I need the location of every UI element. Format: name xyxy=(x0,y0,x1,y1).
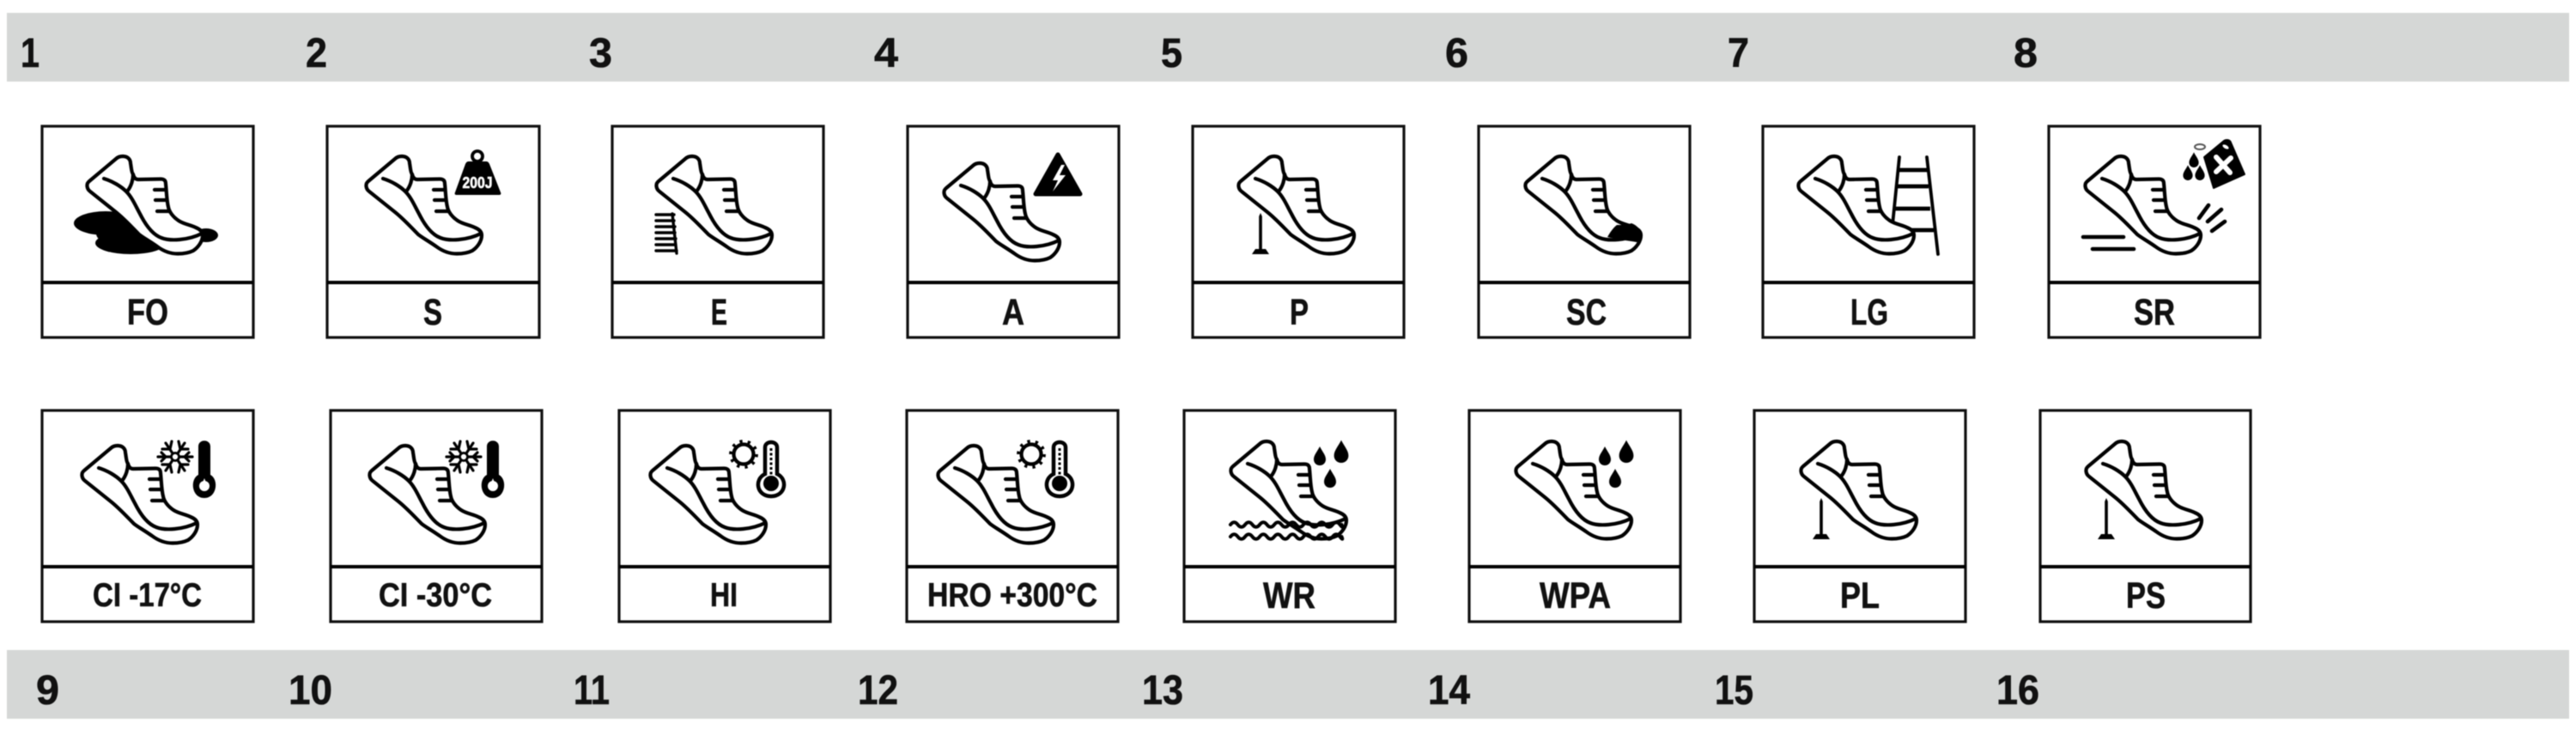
number 16: 16 xyxy=(1996,668,2039,714)
panel: CI -30°C xyxy=(331,410,542,622)
label LG: LG xyxy=(1850,292,1888,333)
number 11: 11 xyxy=(574,668,610,714)
label PL: PL xyxy=(1840,575,1880,617)
label SR: SR xyxy=(2134,292,2175,333)
number 8: 8 xyxy=(2014,31,2038,76)
label WR: WR xyxy=(1263,575,1315,617)
label HRO +300°C: HRO +300°C xyxy=(927,577,1097,614)
label S: S xyxy=(423,292,442,333)
icon: shoe with nail xyxy=(2086,441,2202,539)
panel: SR xyxy=(2049,126,2260,337)
number 2: 2 xyxy=(306,31,327,76)
panel: P xyxy=(1193,126,1404,337)
icon: shoe with snowflake and cold thermometer xyxy=(82,440,216,543)
icon: shoe with snowflake and cold thermometer xyxy=(369,440,504,543)
number 6: 6 xyxy=(1445,31,1468,76)
panel: HRO +300°C xyxy=(907,410,1118,622)
label CI -17°C: CI -17°C xyxy=(93,577,202,614)
label P: P xyxy=(1290,292,1309,333)
number 12: 12 xyxy=(858,668,898,714)
icon: shoe with sun and hot thermometer xyxy=(938,441,1072,543)
icon: shoe with nail xyxy=(1801,441,1917,539)
label FO: FO xyxy=(127,292,168,333)
panel: E xyxy=(612,126,823,337)
panel: WPA xyxy=(1469,410,1680,622)
label HI: HI xyxy=(710,577,738,614)
label PS: PS xyxy=(2126,575,2166,617)
icon: shoe with 200J weight: 200J xyxy=(462,174,493,191)
icon: shoe with electric warning xyxy=(944,155,1080,261)
icon: shoe with ladder xyxy=(1798,156,1938,254)
number 4: 4 xyxy=(874,31,898,76)
top header band xyxy=(7,13,2569,82)
label A: A xyxy=(1002,292,1024,333)
panel: LG xyxy=(1763,126,1974,337)
icon: shoe with 200J weight xyxy=(366,151,501,254)
panel: SC xyxy=(1479,126,1690,337)
panel: S xyxy=(327,126,539,337)
number 3: 3 xyxy=(589,31,612,76)
icon: shoe with spring xyxy=(656,156,772,254)
panel: PS xyxy=(2040,410,2251,622)
icon: shoe with scuff cap xyxy=(1525,156,1641,254)
bottom number band xyxy=(7,650,2569,719)
label E: E xyxy=(711,292,727,333)
icon: shoe with water drops xyxy=(1516,440,1633,539)
panel: A xyxy=(908,126,1119,337)
panel: FO xyxy=(42,126,253,337)
number 10: 10 xyxy=(289,668,332,714)
number 15: 15 xyxy=(1715,668,1753,714)
number 1: 1 xyxy=(21,31,39,76)
label SC: SC xyxy=(1566,292,1607,333)
icon: shoe with slip lines and chemical can xyxy=(2083,140,2245,254)
icon: shoe with nail xyxy=(1238,156,1354,254)
number 9: 9 xyxy=(36,668,59,714)
number 13: 13 xyxy=(1142,668,1183,714)
panel: CI -17°C xyxy=(42,410,253,622)
icon: shoe with sun and hot thermometer xyxy=(650,441,784,543)
label WPA: WPA xyxy=(1540,575,1611,617)
label CI -30°C: CI -30°C xyxy=(379,577,492,614)
panel: HI xyxy=(619,410,830,622)
number 7: 7 xyxy=(1728,31,1749,76)
panel: WR xyxy=(1184,410,1395,622)
number 14: 14 xyxy=(1428,668,1470,714)
number 5: 5 xyxy=(1161,31,1182,76)
icon: shoe in water with drops xyxy=(1230,440,1348,539)
icon: shoe in oil puddle xyxy=(74,156,218,254)
panel: PL xyxy=(1754,410,1965,622)
